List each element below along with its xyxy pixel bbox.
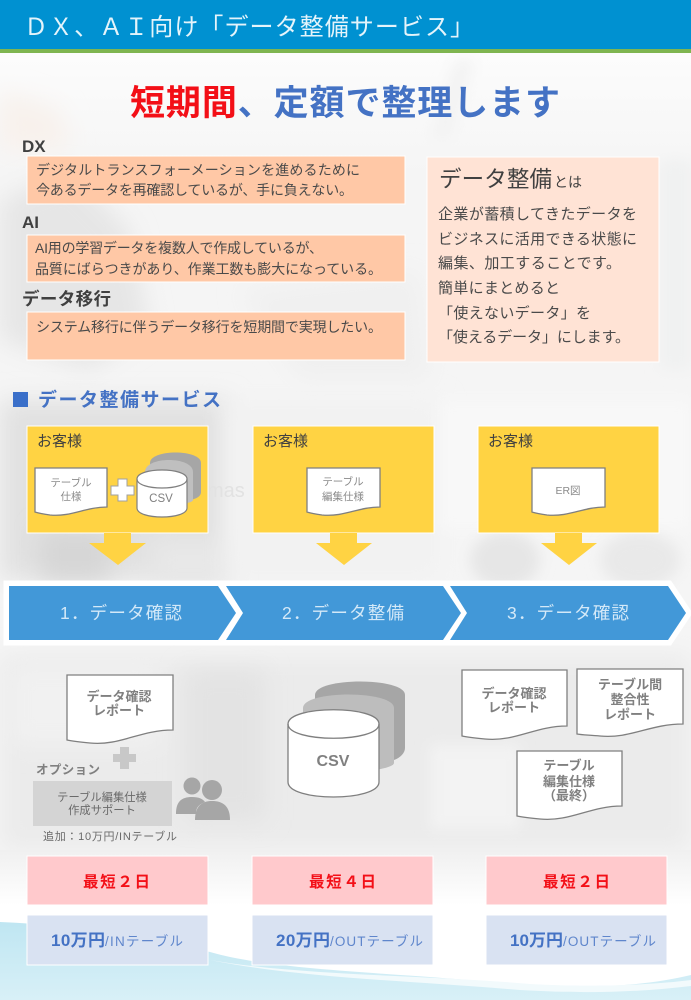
output: data check report	[67, 675, 173, 743]
panel: data migration issue	[22, 289, 405, 360]
icon: table spec document: テーブル	[50, 476, 92, 489]
background photo wash: mas	[207, 480, 245, 502]
panel: what is data preparation: 「使えないデータ」を	[438, 304, 591, 322]
lead time 3: 最短２日	[543, 873, 610, 891]
panel: what is data preparation: ビジネスに活用できる状態に	[438, 231, 637, 248]
option panel: テーブル編集仕様	[57, 790, 147, 804]
price 3: /OUTテーブル	[563, 933, 656, 949]
panel: DX issue: デジタルトランスフォーメーションを進めるために	[36, 162, 360, 178]
output: data check report: レポート	[93, 703, 145, 718]
option panel	[33, 763, 177, 843]
price 3: 10万円	[510, 931, 563, 950]
title: 短期間、定額で整理します	[130, 84, 560, 123]
panel: what is data preparation: 簡単にまとめると	[438, 279, 560, 297]
section heading: データ整備サービス	[38, 388, 221, 411]
panel: DX issue: 今あるデータを再確認しているが、手に負えない。	[36, 182, 353, 198]
icon: table edit spec document: テーブル	[322, 475, 364, 488]
output: final table edit spec: 編集仕様	[543, 774, 595, 789]
icon: people	[176, 778, 230, 820]
panel: customer input 2: お客様	[263, 433, 308, 450]
panel: what is data preparation: とは	[554, 174, 582, 190]
header bar	[0, 0, 691, 53]
icon: plus	[111, 479, 134, 501]
output: final table edit spec: テーブル	[543, 758, 595, 773]
lead time 2: 最短４日	[309, 873, 376, 891]
panel: AI issue	[22, 213, 405, 282]
price 1: /INテーブル	[105, 933, 183, 949]
icon: CSV cylinders: CSV	[149, 493, 173, 505]
arrow: customer 2 down	[316, 533, 372, 565]
panel: AI issue: AI	[22, 213, 39, 232]
price 1	[27, 915, 208, 965]
output: table consistency report: レポート	[604, 707, 656, 722]
panel: data migration issue: データ移行	[22, 289, 111, 309]
lead time 1: 最短２日	[83, 873, 150, 891]
step 2: 2．データ整備	[282, 603, 404, 623]
price 2: 20万円	[276, 931, 330, 950]
icon: table spec document	[35, 468, 107, 515]
panel: DX issue: DX	[22, 137, 46, 156]
output: data check report: データ確認	[86, 689, 152, 704]
panel: what is data preparation	[427, 157, 659, 362]
output: final table edit spec: （最終）	[543, 788, 595, 803]
process chevrons	[9, 586, 686, 640]
step 3	[450, 586, 686, 640]
icon: table edit spec document: 編集仕様	[322, 490, 364, 503]
step 1	[9, 586, 236, 640]
step 2	[226, 586, 461, 640]
arrow: customer 1 down	[89, 533, 146, 565]
panel: customer input 3: お客様	[488, 433, 533, 450]
icon: table spec document: 仕様	[60, 490, 82, 503]
price 2: /OUTテーブル	[330, 933, 423, 949]
panel: DX issue	[22, 137, 405, 204]
panel: AI issue: AI用の学習データを複数人で作成しているが、	[35, 240, 323, 256]
lead time 1	[27, 856, 208, 905]
output: CSV cylinders	[288, 682, 405, 797]
output: final table edit spec	[517, 751, 622, 819]
output: table consistency report	[577, 669, 683, 736]
option panel: 追加：10万円/INテーブル	[43, 829, 177, 843]
header bar: ＤＸ、ＡＩ向け「データ整備サービス」	[24, 14, 474, 41]
panel: customer input 3	[478, 426, 659, 533]
option panel: オプション	[36, 763, 100, 777]
icon: gray plus	[113, 747, 136, 769]
panel: what is data preparation: データ整備	[439, 167, 552, 192]
panel: data migration issue: システム移行に伴うデータ移行を短期間で実現したい。	[36, 319, 382, 335]
output: table consistency report: 整合性	[610, 692, 650, 707]
icon: ER diagram document	[532, 468, 605, 515]
arrow: customer 3 down	[541, 533, 597, 565]
panel: what is data preparation: 編集、加工することです。	[438, 255, 621, 272]
price 3	[486, 915, 667, 965]
panel: customer input 1	[27, 426, 208, 533]
icon: ER diagram document: ER図	[555, 485, 581, 497]
output: table consistency report: テーブル間	[598, 677, 662, 692]
output: CSV cylinders: CSV	[317, 753, 350, 770]
output: data check report 2: データ確認	[481, 686, 547, 701]
output: data check report 2: レポート	[488, 700, 540, 715]
price 2	[252, 915, 433, 965]
price 1: 10万円	[51, 931, 105, 950]
step 1: 1．データ確認	[60, 603, 182, 623]
panel: what is data preparation: 企業が蓄積してきたデータを	[438, 205, 637, 223]
option panel: 作成サポート	[68, 804, 136, 817]
output: data check report 2	[462, 670, 567, 739]
lead time 2	[252, 856, 433, 905]
panel: what is data preparation: 「使えるデータ」にします。	[438, 328, 630, 346]
icon: CSV cylinders	[137, 452, 201, 517]
panel: AI issue: 品質にばらつきがあり、作業工数も膨大になっている。	[35, 261, 382, 277]
panel: customer input 1: お客様	[37, 433, 82, 450]
icon: table edit spec document	[307, 468, 380, 515]
step 3: 3．データ確認	[507, 603, 630, 623]
panel: customer input 2	[253, 426, 434, 533]
lead time 3	[486, 856, 667, 905]
